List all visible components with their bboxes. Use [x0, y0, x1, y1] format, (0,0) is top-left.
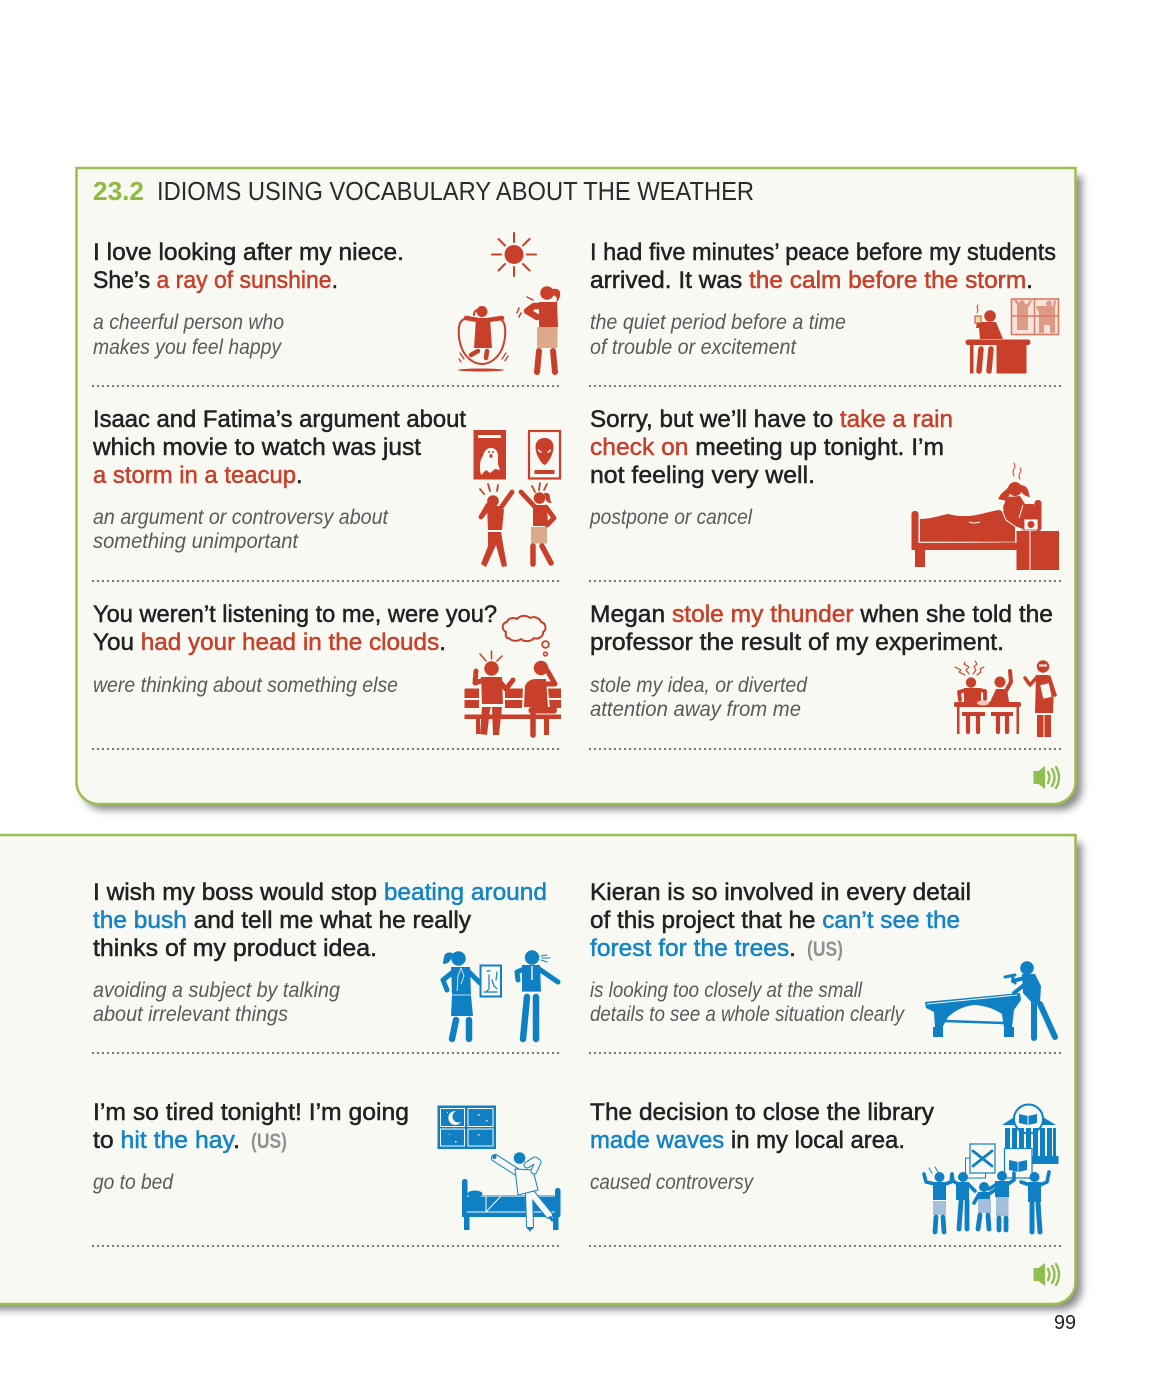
divider [93, 385, 563, 387]
icon: night window and person stretching by bed [438, 1106, 560, 1232]
entry: can't see the forest for the trees: (US) [807, 938, 843, 961]
entry: hit the hay [93, 1099, 563, 1246]
entry: stole my thunder [590, 601, 1061, 749]
icon: audio speaker [1034, 766, 1059, 789]
entry: made waves: caused controversy [590, 1171, 754, 1194]
entry: a storm in a teacup: something unimportant [93, 530, 299, 553]
icon: two people arguing beneath movie posters [474, 430, 560, 567]
entry: a ray of sunshine: I love looking after my niece. [93, 239, 404, 266]
entry: can't see the forest for the trees [590, 879, 1061, 1053]
entry: stole my thunder: attention away from me [590, 698, 801, 721]
icon: two people on a bench with thought cloud [464, 616, 561, 735]
entry: the calm before the storm: of trouble or excitement [590, 336, 797, 359]
entry: a storm in a teacup [92, 406, 563, 581]
divider [93, 1245, 563, 1247]
entry: had your head in the clouds: You weren’t listening to me, were you? [93, 601, 497, 628]
entry: stole my thunder: Megan stole my thunder when she told the [590, 601, 1053, 628]
entry: the calm before the storm: the quiet period before a time [590, 311, 846, 334]
entry: can't see the forest for the trees: is looking too closely at the small [590, 979, 863, 1002]
icon: teacher at desk with students at window [966, 299, 1058, 374]
icon: audio speaker [1034, 1263, 1059, 1286]
entry: take a rain check on: Sorry, but we’ll have to take a rain [590, 406, 953, 433]
entry: can't see the forest for the trees: details to see a whole situation clearly [590, 1003, 905, 1026]
entry: a storm in a teacup: which movie to watch was just [92, 434, 421, 461]
entry: can't see the forest for the trees: of this project that he can’t see the [590, 907, 960, 934]
entry: hit the hay: I’m so tired tonight! I’m going [93, 1099, 409, 1126]
icon: man hammering a table [925, 961, 1055, 1038]
divider [93, 580, 563, 582]
entry: had your head in the clouds: were thinking about something else [93, 674, 398, 697]
divider [93, 748, 563, 750]
entry: beating around the bush: avoiding a subject by talking [93, 979, 340, 1002]
entry: beating around the bush: I wish my boss would stop beating around [93, 879, 547, 906]
entry: beating around the bush: about irrelevant things [93, 1003, 288, 1026]
entry: take a rain check on: check on meeting up tonight. I’m [590, 434, 944, 461]
icon: woman with chart and man talking [443, 950, 558, 1039]
entry: hit the hay: go to bed [93, 1171, 174, 1194]
entry: stole my thunder: stole my idea, or diverted [590, 674, 808, 697]
entry: the calm before the storm: I had five minutes’ peace before my students [590, 239, 1056, 266]
entry: hit the hay: to hit the hay. [93, 1127, 240, 1154]
entry: can't see the forest for the trees: forest for the trees. [590, 935, 796, 962]
page number: 99 [1054, 1312, 1076, 1334]
entry: hit the hay: (US) [251, 1130, 287, 1153]
icon: students at a table and a professor [954, 660, 1055, 737]
divider [590, 580, 1061, 582]
entry: a ray of sunshine: makes you feel happy [93, 336, 282, 359]
divider [93, 1052, 563, 1054]
entry: a ray of sunshine [93, 233, 563, 386]
divider [590, 748, 1061, 750]
entry: a ray of sunshine: a cheerful person who [93, 311, 284, 334]
entry: take a rain check on [589, 406, 1061, 581]
entry: the calm before the storm [590, 239, 1061, 386]
entry: made waves: made waves in my local area. [590, 1127, 905, 1154]
entry: a storm in a teacup: a storm in a teacup [93, 462, 296, 489]
entry: take a rain check on: postpone or cancel [589, 506, 753, 529]
heading: section 23.2: IDIOMS USING VOCABULARY ABOUT THE WEATHER [157, 176, 754, 206]
entry: a storm in a teacup: an argument or controversy about [93, 506, 389, 529]
entry: beating around the bush: thinks of my product idea. [93, 935, 377, 962]
entry: beating around the bush [93, 879, 563, 1053]
entry: had your head in the clouds: You had your head in the clouds. [93, 629, 446, 656]
entry: beating around the bush: the bush and tell me what he really [93, 907, 471, 934]
entry: made waves [590, 1099, 1061, 1246]
entry: a storm in a teacup: Isaac and Fatima’s argument about [93, 406, 466, 433]
entry: stole my thunder: professor the result of my experiment. [590, 629, 1004, 656]
entry: had your head in the clouds [93, 601, 563, 749]
icon: protesters outside a library [924, 1104, 1058, 1232]
icon: sun and girls skipping [458, 233, 560, 372]
entry: take a rain check on: not feeling very well. [590, 462, 815, 489]
entry: a ray of sunshine: She’s a ray of sunshine. [93, 267, 338, 294]
divider [590, 1245, 1061, 1247]
heading: section 23.2: 23.2 [93, 176, 144, 206]
entry: can't see the forest for the trees: Kieran is so involved in every detail [590, 879, 971, 906]
panel: more weather idioms [0, 835, 1082, 1310]
entry: a storm in a teacup: . [296, 462, 303, 489]
panel: idioms using vocabulary about the weather [76, 168, 1082, 810]
divider [590, 385, 1061, 387]
icon: sick woman sitting up in bed [912, 463, 1059, 570]
divider [590, 1052, 1061, 1054]
entry: made waves: The decision to close the library [590, 1099, 934, 1126]
entry: the calm before the storm: arrived. It was the calm before the storm. [590, 267, 1033, 294]
